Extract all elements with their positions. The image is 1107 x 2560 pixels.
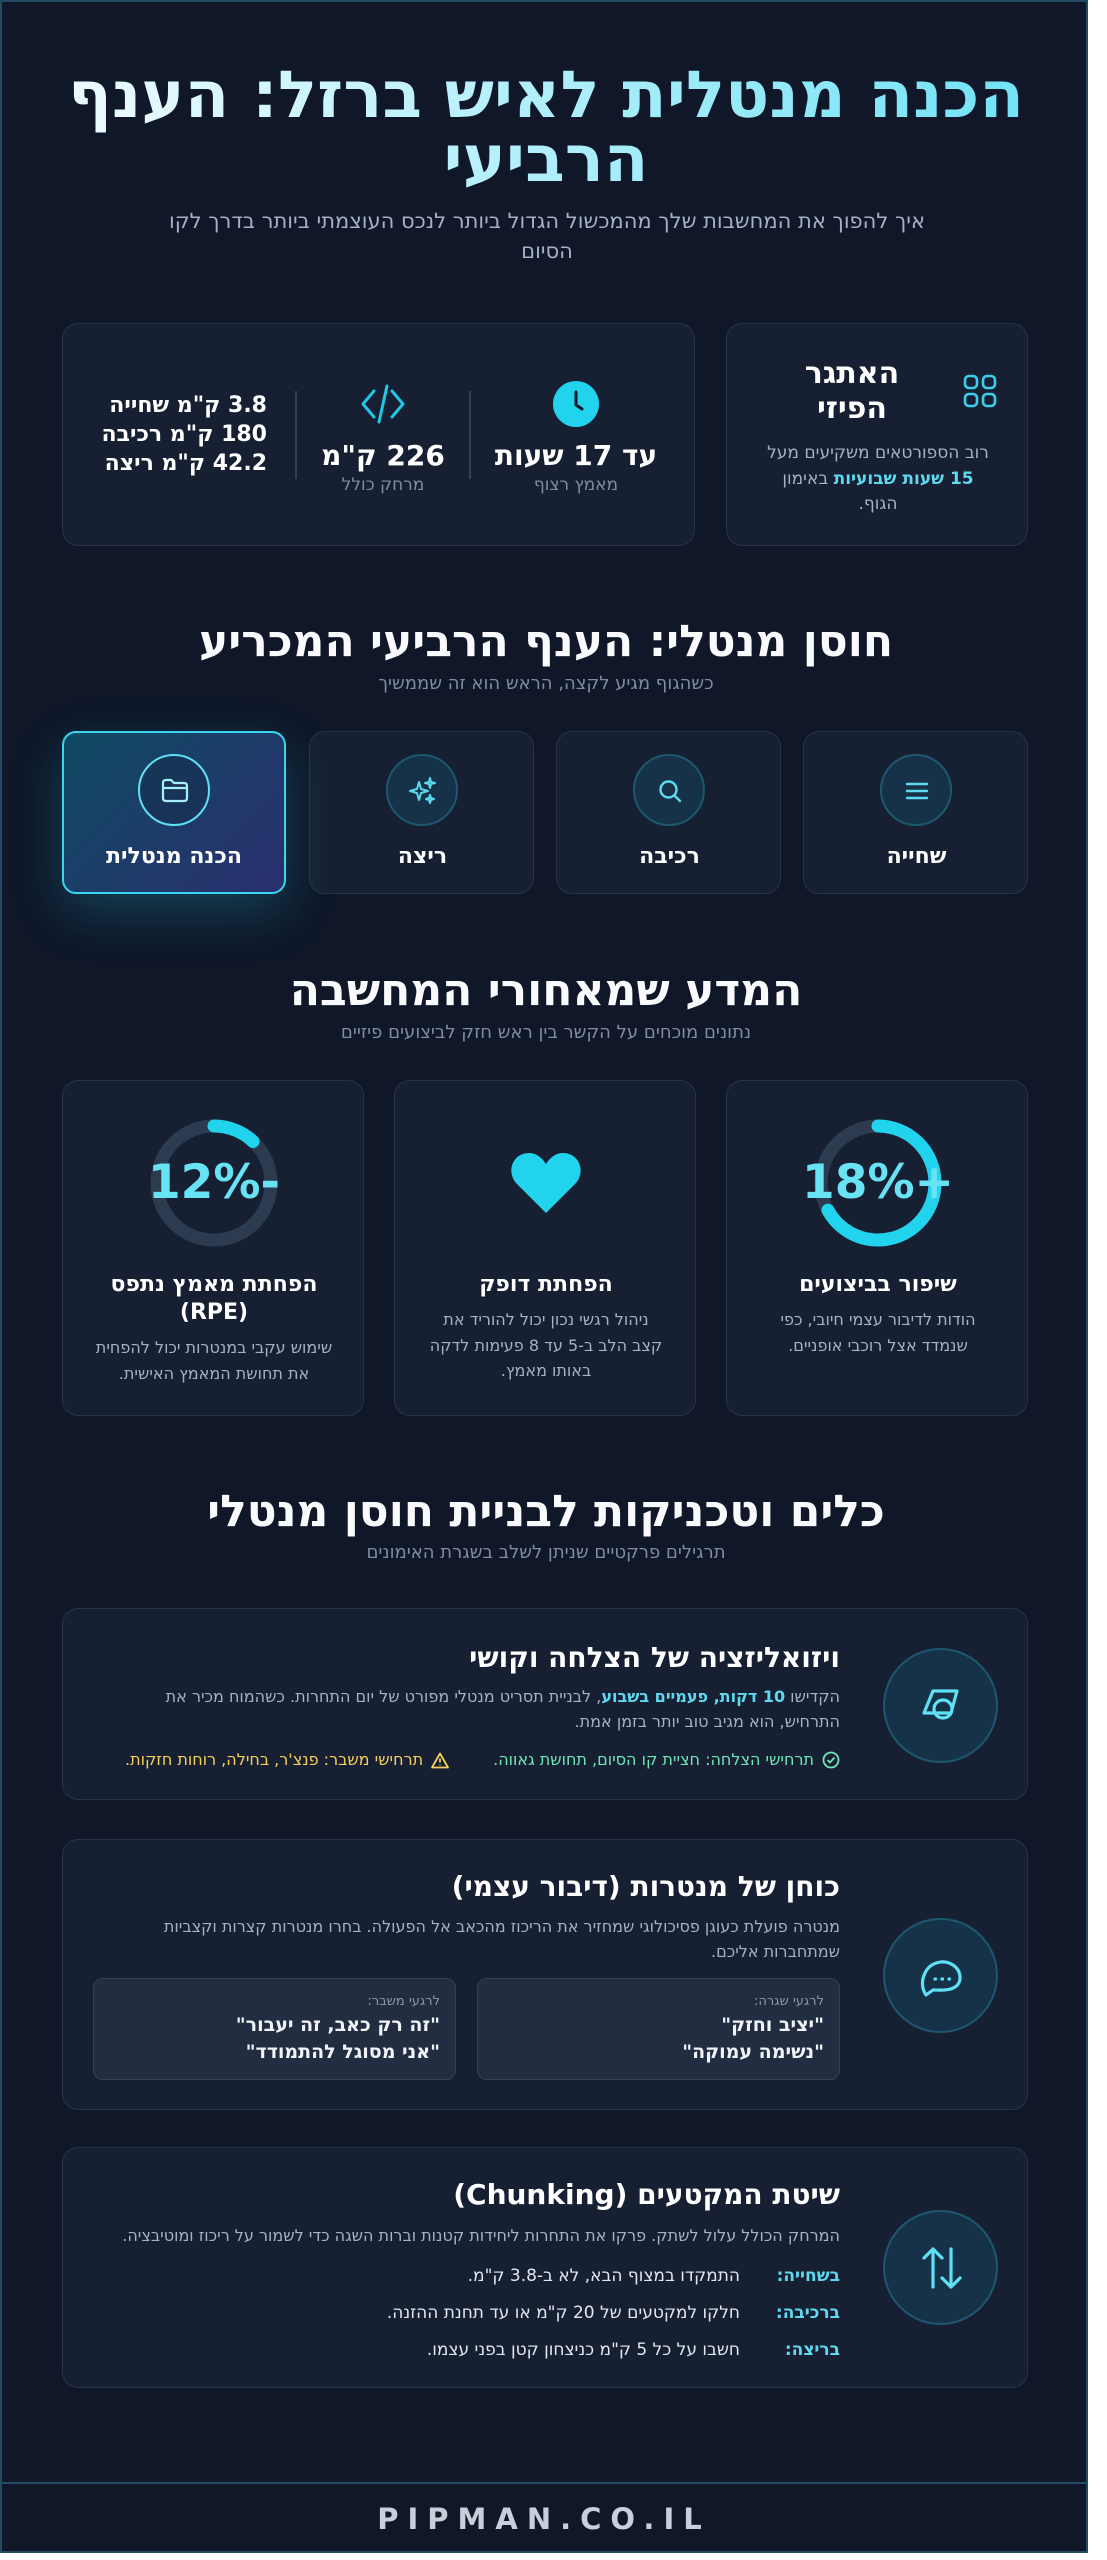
icon: sparkles [386, 754, 458, 826]
chart: ring 12% [148, 1120, 280, 1246]
icon: visualization [883, 1648, 998, 1763]
icon: code [362, 384, 404, 424]
chart: ring 18%: +18% [802, 1155, 954, 1210]
card: heart rate: ניהול רגשי נכון יכול להוריד את קצב הלב ב-5 עד 8 פעימות לדקה באותו מאמץ. [430, 1310, 662, 1380]
callout: crisis moments: "אני מסוגל להתמודד" [246, 2041, 440, 2063]
card: mental prep (highlighted): הכנה מנטלית [106, 844, 242, 869]
list: chunks: בשחייה: [777, 2266, 840, 2286]
stat: legs: 42.2 ק"מ ריצה [105, 451, 267, 476]
card: performance improvement: שיפור בביצועים [799, 1272, 957, 1297]
text block: רוב הספורטאים משקיעים מעל 15 שעות שבועיות באימון הגוף. [767, 443, 989, 514]
card: performance improvement [726, 1080, 1028, 1416]
heading: tools: כלים וטכניקות לבניית חוסן מנטלי [207, 1486, 885, 1537]
icon: search [633, 754, 705, 826]
subheading: תרגילים פרקטיים שניתן לשלב בשגרת האימונים [366, 1542, 726, 1563]
subheading: נתונים מוכחים על הקשר בין ראש חזק לביצועים פיזיים [341, 1022, 751, 1043]
panel: visualization [62, 1608, 1028, 1800]
chart: ring 12%: -12% [148, 1155, 280, 1210]
card: run [309, 731, 534, 894]
callout: calm moments: לרגעי שגרה: [754, 1994, 824, 2009]
stat: distance: מרחק כולל [342, 475, 424, 495]
card: performance improvement: הודות לדיבור עצמי חיובי, כפי שנמדד אצל רוכבי אופניים. [780, 1310, 976, 1354]
stat: duration: עד 17 שעות [495, 439, 657, 472]
text block: מנטרה פועלת כעוגן פסיכולוגי שמחזיר את הריכוז מהכאב אל הפעולה. בחרו מנטרות קצרות וקצביות שמתחברות אליכם. [164, 1917, 840, 1961]
stat: distance: 226 ק"מ [321, 439, 445, 472]
card: swim [803, 731, 1028, 894]
callout: crisis moments: לרגעי משבר: [367, 1994, 440, 2009]
stat: legs: 180 ק"מ רכיבה [101, 422, 267, 447]
icon: heart [511, 1153, 581, 1213]
icon: menu [880, 754, 952, 826]
footer [2, 2482, 1086, 2553]
text block: הקדישו 10 דקות, פעמיים בשבוע, לבניית תסריט מנטלי מפורט של יום התחרות. כשהמוח מכיר את התרחיש, הוא מגיב טוב יותר בזמן אמת. [166, 1687, 840, 1731]
list: chunks: התמקדו במצוף הבא, לא ב-3.8 ק"מ. [468, 2266, 740, 2286]
icon: speech [883, 1918, 998, 2033]
stat: distance [321, 384, 445, 495]
card: swim: שחייה [887, 844, 946, 869]
callout: calm moments: "יציב וחזק" [721, 2014, 824, 2036]
callout: scenarios [125, 1750, 840, 1769]
icon: folder [138, 754, 210, 826]
subtitle: איך להפוך את המחשבות שלך מהמכשול הגדול ביותר לנכס העוצמתי ביותר בדרך לקו הסיום [169, 209, 925, 263]
heading: science: המדע שמאחורי המחשבה [290, 965, 802, 1016]
callout: crisis moments: "זה רק כאב, זה יעבור" [236, 2014, 440, 2036]
stat: duration [495, 381, 657, 495]
panel: physical challenge [726, 323, 1028, 546]
card: heart rate [394, 1080, 696, 1416]
list: chunks: חשבו על כל 5 ק"מ כניצחון קטן בפני עצמו. [427, 2340, 740, 2360]
card: RPE: הפחתת מאמץ נתפס (RPE) [111, 1272, 317, 1325]
panel: chunking [62, 2147, 1028, 2388]
text block: המרחק הכולל עלול לשתק. פרקו את התחרות ליחידות קטנות וברות השגה כדי לשמור על ריכוז ומוטיבציה. [122, 2226, 840, 2245]
callout: crisis moments [93, 1978, 456, 2080]
stat: duration: מאמץ רצוף [534, 475, 618, 495]
stat: legs [101, 393, 267, 476]
list: chunks: חלקו למקטעים של 20 ק"מ או עד תחנת ההזנה. [387, 2303, 740, 2323]
card: RPE [62, 1080, 364, 1416]
card: bike: רכיבה [639, 844, 700, 869]
heading: שיטת המקטעים (Chunking) [453, 2178, 840, 2211]
heading: כוחן של מנטרות (דיבור עצמי) [452, 1870, 840, 1903]
callout: scenarios: תרחישי משבר: פנצ'ר, בחילה, רוחות חזקות. [125, 1750, 423, 1769]
card: bike [556, 731, 781, 894]
icon: arrows [883, 2210, 998, 2325]
title: הכנה מנטלית לאיש ברזל: הענף הרביעי [68, 58, 1024, 197]
card: heart rate: הפחתת דופק [479, 1272, 613, 1297]
heading: האתגר הפיזי [805, 356, 899, 426]
callout: scenarios: תרחישי הצלחה: חציית קו הסיום, תחושת גאווה. [493, 1750, 814, 1769]
heading: ויזואליזציה של הצלחה וקושי [469, 1641, 840, 1674]
card: RPE: שימוש עקבי במנטרות יכול להפחית את תחושת המאמץ האישית. [96, 1338, 332, 1382]
heading: mental resilience: חוסן מנטלי: הענף הרביעי המכריע [199, 616, 893, 667]
list: chunks [387, 2266, 840, 2360]
callout: calm moments [477, 1978, 840, 2080]
chart: ring 18% [802, 1120, 954, 1246]
list: chunks: ברכיבה: [776, 2303, 840, 2323]
card: run: ריצה [398, 844, 447, 869]
footer: PIPMAN.CO.IL [377, 2502, 711, 2536]
subheading: כשהגוף מגיע לקצה, הראש הוא זה שממשיך [378, 673, 714, 694]
list: chunks: בריצה: [785, 2340, 840, 2360]
icon: grid [964, 374, 996, 408]
panel: race stats [62, 323, 695, 546]
icon: clock [553, 381, 599, 427]
callout: calm moments: "נשימה עמוקה" [682, 2041, 824, 2063]
panel: mantras [62, 1839, 1028, 2110]
card: mental prep (highlighted) [62, 731, 286, 894]
stat: legs: 3.8 ק"מ שחייה [109, 393, 267, 418]
